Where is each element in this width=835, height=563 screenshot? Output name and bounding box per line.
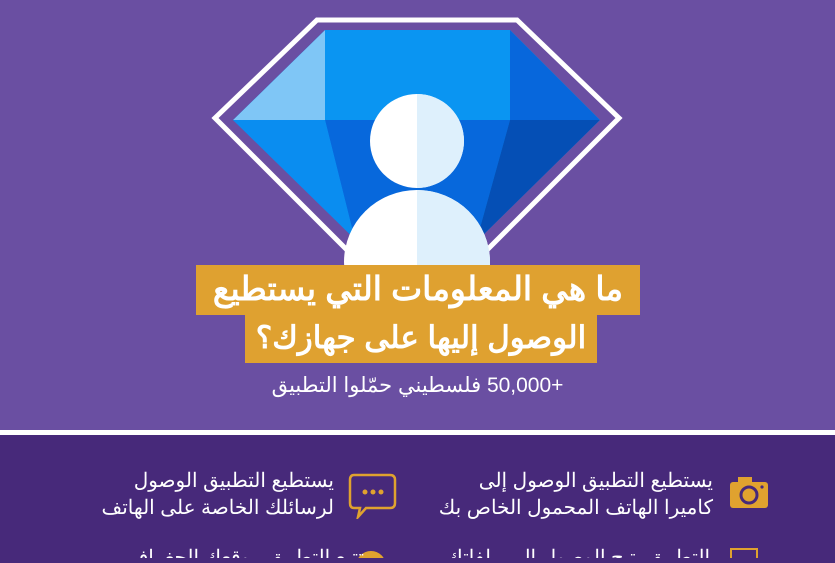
divider band (0, 430, 835, 563)
title banner (196, 265, 640, 363)
title text line 2: الوصول إليها على جهازك؟ (256, 320, 586, 355)
text: لرسائلك الخاصة على الهاتف (101, 497, 334, 519)
item: camera (439, 470, 768, 519)
text: يستطيع التطبيق الوصول إلى (479, 470, 713, 492)
text (101, 470, 334, 519)
subtitle: +50,000 فلسطيني حمّلوا التطبيق (272, 374, 563, 397)
title text line 1: ما هي المعلومات التي يستطيع (213, 270, 623, 307)
text: يستطيع التطبيق الوصول (134, 470, 334, 492)
item row 3 (partially visible) (122, 547, 758, 558)
text: كاميرا الهاتف المحمول الخاص بك (439, 497, 713, 519)
icon: chat bubble (348, 474, 396, 519)
item: messages (101, 470, 396, 519)
icon: camera (730, 477, 768, 508)
illustration: diamond with user (212, 18, 622, 265)
text (439, 470, 714, 519)
